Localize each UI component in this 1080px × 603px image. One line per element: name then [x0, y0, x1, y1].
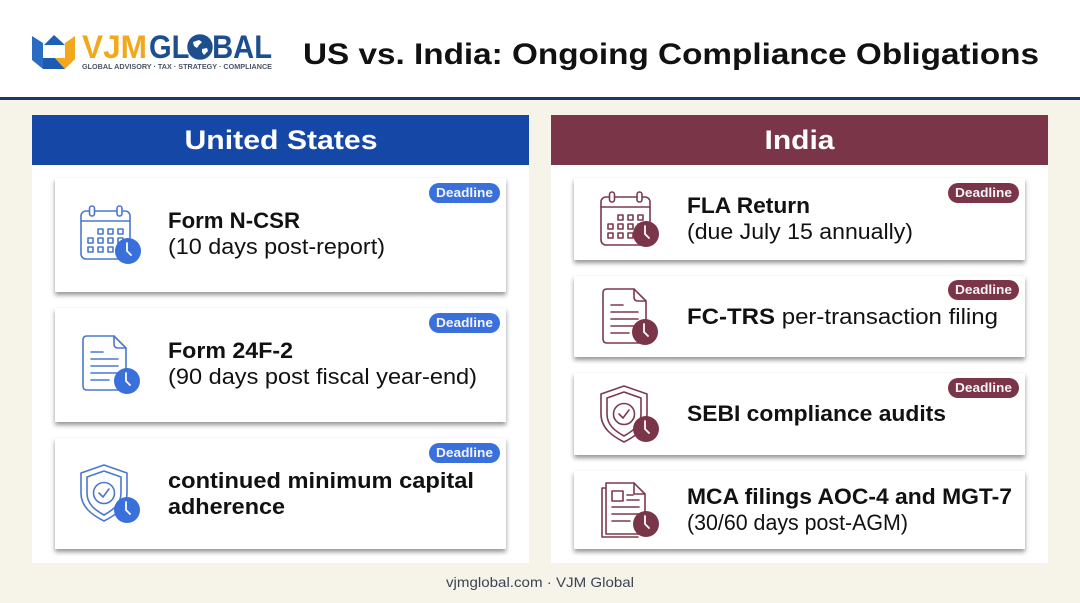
text: Form N-CSR: (10 days post-report): [168, 234, 385, 259]
text: Form 24F-2: Form 24F-2: [168, 338, 293, 363]
logo: VJM Global: [32, 29, 272, 71]
badge: Deadline: Deadline: [436, 446, 493, 460]
badge: Deadline: [948, 378, 1019, 398]
panel heading: United States: [32, 115, 529, 165]
icon: document with clock: [83, 336, 140, 394]
tagline: GLOBAL ADVISORY · TAX · STRATEGY · COMPLIANCE: [82, 62, 272, 71]
badge: Deadline: Deadline: [955, 186, 1012, 200]
globe: [187, 34, 213, 60]
text: Form N-CSR: [168, 208, 385, 259]
footer: vjmglobal.com · VJM Global: [446, 574, 634, 590]
badge: Deadline: [429, 443, 500, 463]
badge: Deadline: [429, 183, 500, 203]
panel: United States: [32, 115, 529, 563]
text: continued minimum capital adherence: continued minimum capital: [168, 468, 474, 493]
text: FLA Return: FLA Return: [687, 193, 810, 218]
icon: calendar with clock: [601, 192, 659, 247]
badge: Deadline: Deadline: [955, 381, 1012, 395]
panel: India: [551, 115, 1048, 563]
text: Form 24F-2: (90 days post fiscal year-end): [168, 364, 477, 389]
icon: form with clock: [602, 483, 659, 537]
card: continued minimum capital adherence: [55, 438, 506, 549]
badge: Deadline: Deadline: [436, 316, 493, 330]
badge: Deadline: [429, 313, 500, 333]
text: MCA filings: MCA filings AOC-4 and MGT-7: [687, 484, 1012, 509]
text: FC-TRS per-transaction filing: FC-TRS per-transaction filing: [687, 304, 998, 329]
panel heading: India: [551, 115, 1048, 165]
logo: VJM Global: GLOBAL: [149, 29, 272, 65]
icon: document with clock: [603, 289, 658, 345]
text: continued minimum capital adherence: [168, 468, 474, 519]
text: continued minimum capital adherence: adherence: [168, 494, 285, 519]
text: MCA filings: [687, 484, 1012, 535]
header band: [0, 0, 1080, 100]
badge: Deadline: Deadline: [955, 283, 1012, 297]
text: Form N-CSR: Form N-CSR: [168, 208, 300, 233]
text: SEBI compliance audits: SEBI compliance audits: [687, 401, 946, 426]
icon: shield with clock: [601, 386, 659, 442]
badge: Deadline: Deadline: [436, 186, 493, 200]
badge: Deadline: [948, 280, 1019, 300]
badge: Deadline: [948, 183, 1019, 203]
panel heading: India: India: [764, 125, 836, 155]
card: Form 24F-2: [55, 308, 506, 422]
icon: calendar with clock: [81, 206, 141, 264]
card: MCA filings: [574, 471, 1025, 549]
title: US vs. India: Ongoing Compliance Obligations: [303, 38, 1039, 71]
text: FLA Return: (due July 15 annually): [687, 219, 913, 244]
logo mark: [32, 35, 75, 69]
card: FLA Return: [574, 178, 1025, 260]
wordmark: VJM: [82, 29, 147, 65]
text: MCA filings: (30/60 days post-AGM): [687, 510, 908, 535]
card: FC-TRS: [574, 276, 1025, 357]
card: SEBI compliance audits: [574, 373, 1025, 455]
panel heading: United States: United States: [184, 125, 378, 155]
text: Form 24F-2: [168, 338, 477, 389]
text: FLA Return: [687, 193, 913, 244]
icon: shield with clock: [81, 465, 140, 523]
card: Form N-CSR: [55, 178, 506, 292]
